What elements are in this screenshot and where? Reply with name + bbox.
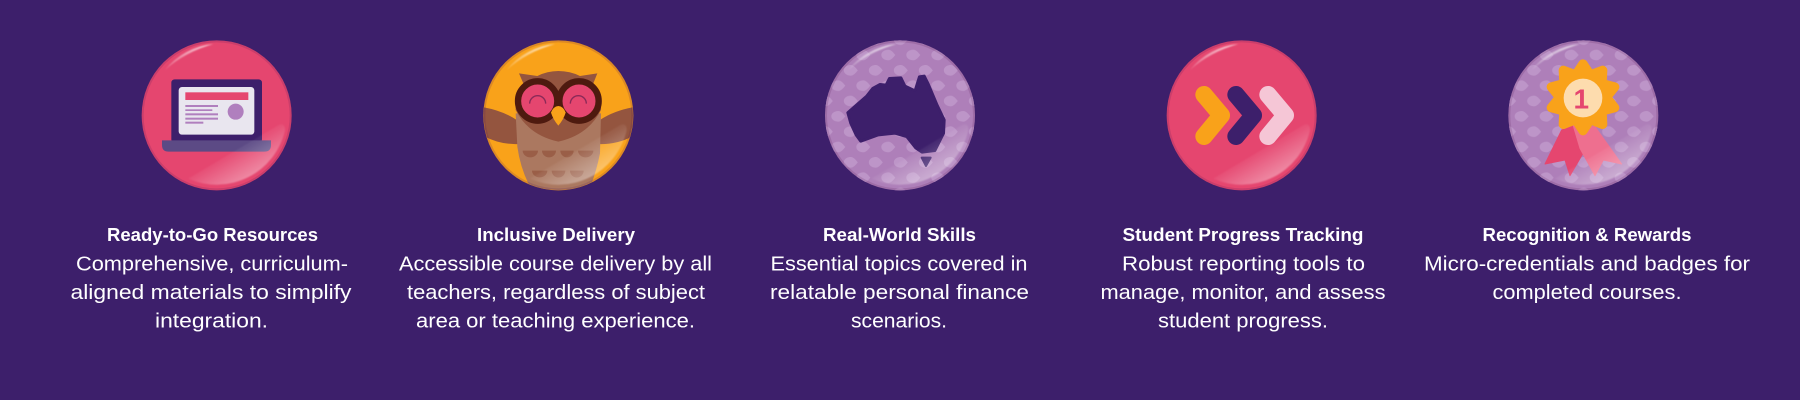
text block: relatable personal finance: [770, 282, 1029, 304]
text block: Accessible course delivery by all: [399, 254, 712, 276]
panel: Student Progress Tracking: [1100, 40, 1386, 332]
icon: medal badge: [1508, 40, 1658, 190]
heading: Inclusive Delivery: [477, 224, 636, 245]
icon: Australia map badge: [825, 40, 975, 190]
text block: Micro-credentials and badges for: [1424, 254, 1750, 276]
heading: Real-World Skills: [823, 224, 976, 245]
text block: [1100, 254, 1386, 332]
heading: Ready-to-Go Resources: [107, 224, 318, 245]
panel: Real-World Skills: [770, 40, 1029, 332]
text block: Comprehensive, curriculum-: [76, 254, 348, 276]
text block: manage, monitor, and assess: [1100, 282, 1386, 304]
heading: Recognition & Rewards: [1482, 224, 1692, 245]
text block: student progress.: [1158, 310, 1328, 332]
text block: [399, 254, 712, 332]
icon: chevrons badge: [1167, 40, 1317, 190]
text block: integration.: [155, 310, 268, 332]
panel: Recognition & Rewards: [1424, 40, 1750, 304]
heading: Student Progress Tracking: [1122, 224, 1364, 245]
text block: Essential topics covered in: [770, 254, 1028, 276]
text block: [1424, 254, 1750, 304]
text block: [770, 254, 1029, 332]
text block: teachers, regardless of subject: [407, 282, 705, 304]
icon: owl badge: [480, 40, 637, 191]
icon: medal badge: 1: [1574, 83, 1589, 114]
panel: Inclusive Delivery: [399, 40, 712, 332]
text block: scenarios.: [851, 310, 947, 332]
text block: completed courses.: [1492, 282, 1682, 304]
text block: area or teaching experience.: [416, 310, 695, 332]
text block: aligned materials to simplify: [70, 282, 352, 304]
icon: laptop badge: [142, 40, 292, 190]
text block: [70, 254, 352, 332]
text block: Robust reporting tools to: [1122, 254, 1365, 276]
panel: Ready-to-Go Resources: [70, 40, 352, 332]
